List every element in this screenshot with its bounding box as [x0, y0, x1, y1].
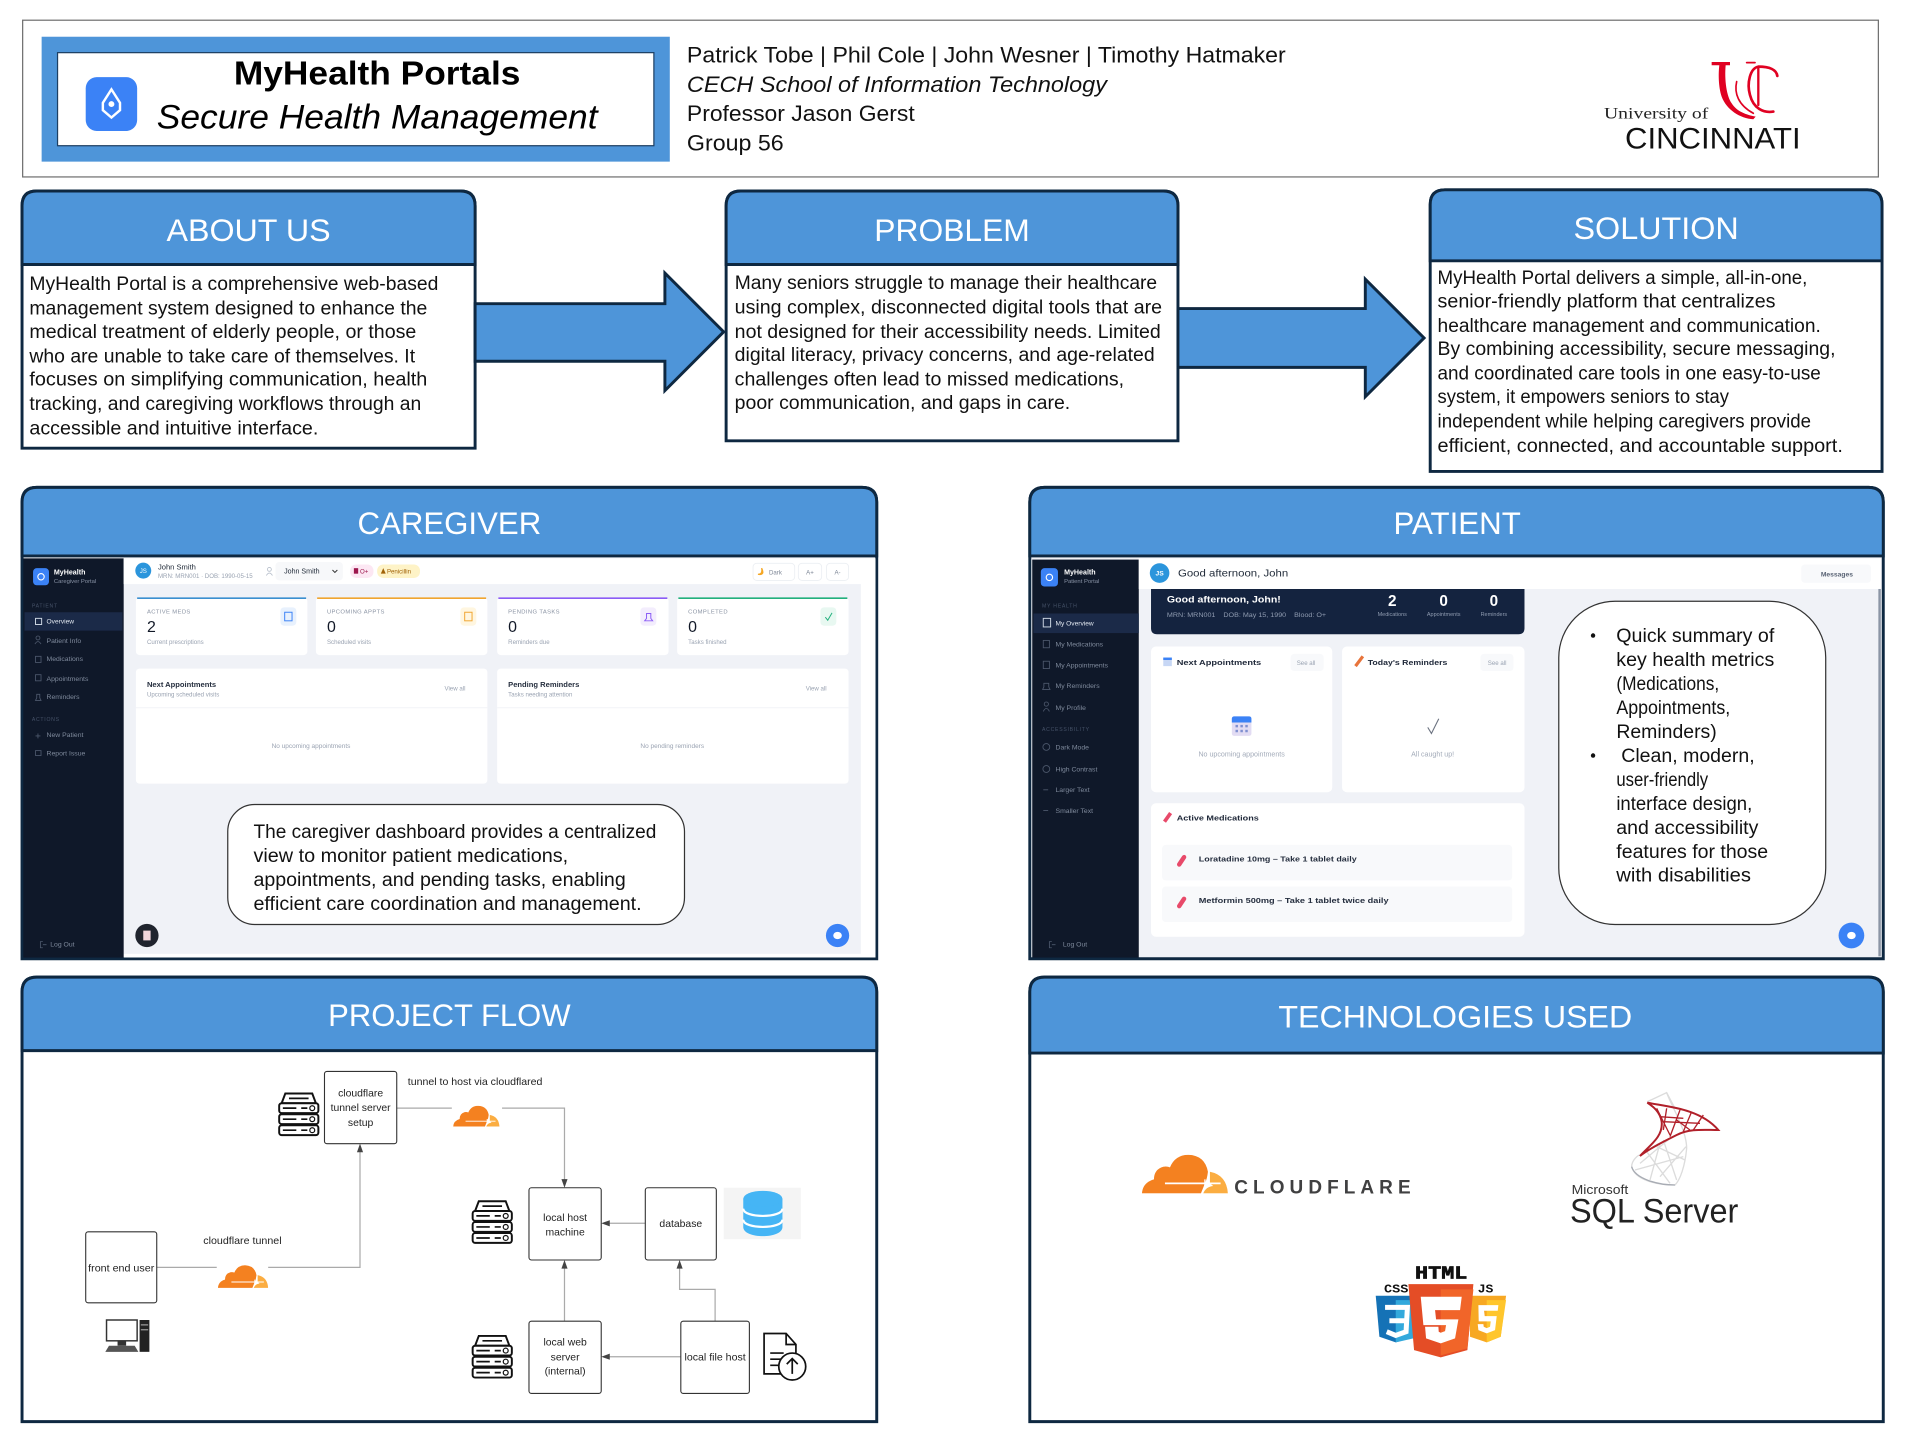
patient greeting banner: [1151, 589, 1524, 634]
heading: ABOUT US: [167, 212, 331, 248]
text block: system, it empowers seniors to stay: [1438, 386, 1729, 408]
caregiver top bar: John Smith: [158, 562, 196, 571]
patient greeting banner: 2: [1388, 593, 1397, 610]
callout: caregiver description: efficient care coordination and management.: [253, 893, 642, 915]
text block: efficient, connected, and accountable support.: [1438, 435, 1843, 457]
next appointments panel: Upcoming scheduled visits: [147, 692, 219, 699]
flow box: database: database: [659, 1219, 702, 1230]
text block: MyHealth Portal is a comprehensive web-based: [29, 273, 438, 295]
caregiver top bar: A+: [806, 569, 814, 576]
caregiver top bar: O+: [360, 569, 369, 576]
patient greeting banner: MRN: MRN001 DOB: May 15, 1990 Blood: O+: [1167, 612, 1326, 619]
title box: [42, 37, 670, 162]
text block: medical treatment of elderly people, or those: [29, 321, 416, 343]
team information: Patrick Tobe | Phil Cole | John Wesner | Timothy Hatmaker: [687, 42, 1286, 67]
next appointments card: See all: [1297, 660, 1315, 667]
caregiver sidebar: Patient Info: [47, 638, 81, 645]
caregiver sidebar: PATIENT: [32, 603, 58, 609]
stat card: active meds: ACTIVE MEDS: [147, 609, 191, 615]
stat card: upcoming appts: UPCOMING APPTS: [327, 609, 385, 615]
callout: patient features: (Medications,: [1616, 673, 1719, 695]
pending reminders panel: Pending Reminders: [508, 680, 579, 689]
patient sidebar: MyHealth: [1064, 568, 1096, 576]
patient sidebar: Smaller Text: [1056, 808, 1093, 815]
heading: [1030, 977, 1883, 1053]
callout: caregiver description: view to monitor patient medications,: [253, 845, 568, 867]
flow box: front end user: [86, 1232, 157, 1303]
heading: SOLUTION: [1573, 210, 1739, 246]
text block: poor communication, and gaps in care.: [735, 392, 1070, 414]
caregiver sidebar: New Patient: [47, 732, 84, 739]
callout: caregiver description: The caregiver dashboard provides a centralized: [253, 821, 656, 843]
next appointments panel: [136, 669, 487, 784]
flow box: local web server: server: [551, 1352, 580, 1363]
patient sidebar: My Profile: [1056, 705, 1086, 712]
panel: project flow: [22, 977, 877, 1422]
callout: patient features: Clean, modern,: [1621, 745, 1755, 767]
callout: patient features: and accessibility: [1616, 817, 1759, 839]
icon: server middle: [473, 1201, 512, 1243]
text block: tracking, and caregiving workflows through an: [29, 393, 421, 415]
patient sidebar: Dark Mode: [1056, 744, 1089, 751]
caregiver sidebar: Overview: [47, 618, 74, 625]
today's reminders card: [1342, 647, 1524, 792]
team information: Group 56: [687, 131, 784, 156]
flow box: local file host: [681, 1321, 749, 1393]
logo: HTML CSS JS: [1376, 1262, 1506, 1357]
stat card: active meds: Current prescriptions: [147, 639, 204, 646]
icon: calendar: [1232, 716, 1251, 736]
caregiver top bar: Penicillin: [387, 569, 411, 576]
heading: PATIENT: [1393, 505, 1521, 541]
team information: [687, 42, 1286, 156]
text block: management system designed to enhance the: [29, 298, 427, 320]
header banner: [23, 20, 1878, 177]
flow box: local web server: [529, 1321, 601, 1393]
pending reminders panel: Tasks needing attention: [508, 692, 572, 699]
patient sidebar: Log Out: [1063, 942, 1087, 949]
text block: [28, 273, 438, 440]
patient greeting banner: 0: [1439, 593, 1448, 610]
next appointments card: [1151, 647, 1332, 792]
flow box: front end user: front end user: [88, 1264, 155, 1275]
flow box: cloudflare tunnel server setup: [324, 1071, 397, 1144]
panel: solution: [1430, 190, 1882, 471]
text block: challenges often lead to missed medications,: [735, 369, 1124, 391]
logo: SQL Server: Microsoft: [1572, 1183, 1629, 1197]
text block: healthcare management and communication.: [1438, 315, 1821, 337]
patient greeting banner: Reminders: [1481, 612, 1507, 618]
stat card: completed: 0: [688, 619, 697, 636]
caregiver sidebar: Log Out: [50, 942, 75, 949]
connectors: [157, 1108, 715, 1357]
text block: MyHealth Portal delivers a simple, all-in-one,: [1438, 267, 1807, 289]
icon: computer: [105, 1320, 149, 1352]
next appointments panel: No upcoming appointments: [272, 743, 350, 750]
text block: Many seniors struggle to manage their healthcare: [735, 272, 1157, 294]
stat card: active meds: 2: [147, 619, 156, 636]
logo: SQL Server: [1570, 1093, 1738, 1231]
panel: patient: [1030, 487, 1883, 959]
team information: CECH School of Information Technology: [687, 72, 1109, 97]
panel: caregiver: [22, 487, 877, 959]
today's reminders card: Today's Reminders: [1368, 658, 1447, 667]
caregiver top bar: JS: [140, 568, 147, 575]
callout: patient features: Reminders): [1616, 721, 1717, 743]
arrowheads: [357, 1144, 683, 1360]
patient sidebar: My Overview: [1056, 621, 1094, 628]
patient sidebar: Patient Portal: [1064, 579, 1099, 585]
flow box: local host machine: machine: [545, 1228, 585, 1239]
patient sidebar: MY HEALTH: [1042, 603, 1078, 609]
icon: server top: [279, 1093, 318, 1135]
flow box: local host machine: local host: [543, 1213, 587, 1224]
callout: caregiver description: appointments, and pending tasks, enabling: [253, 869, 626, 891]
flow box: database: [645, 1188, 716, 1260]
icon: file upload: [764, 1333, 806, 1380]
stat card: completed: [677, 598, 849, 655]
text block: and coordinated care tools in one easy-to-use: [1438, 363, 1821, 385]
caregiver top bar: John Smith: [284, 568, 320, 576]
icon: cloud lower: [218, 1265, 268, 1288]
heading: [726, 191, 1178, 264]
callout: patient features: [1559, 601, 1826, 924]
patient sidebar: My Appointments: [1056, 662, 1109, 669]
flow box: local file host: local file host: [684, 1352, 746, 1363]
logo: HTML CSS JS: JS: [1478, 1283, 1493, 1297]
active medications card: [1151, 803, 1524, 937]
patient sidebar: My Medications: [1056, 642, 1104, 649]
callout: patient features: features for those: [1616, 841, 1768, 863]
stat card: completed: COMPLETED: [688, 609, 728, 615]
text block: accessible and intuitive interface.: [29, 418, 318, 440]
caregiver sidebar: Medications: [47, 656, 84, 663]
text block: [735, 272, 1162, 414]
active medications card: Metformin 500mg – Take 1 tablet twice daily: [1199, 896, 1390, 905]
stat card: pending tasks: 0: [508, 619, 517, 636]
callout: patient features: user-friendly: [1616, 769, 1708, 791]
caregiver sidebar: ACTIONS: [32, 717, 60, 723]
callout: patient features: with disabilities: [1615, 865, 1751, 887]
caregiver sidebar: Caregiver Portal: [54, 579, 96, 585]
patient sidebar: [1032, 560, 1139, 958]
caregiver top bar: [124, 558, 876, 584]
heading: [1430, 190, 1882, 261]
heading: PROJECT FLOW: [328, 997, 571, 1033]
heading: [1030, 487, 1883, 556]
icon: chat button: [826, 924, 849, 947]
pending reminders panel: View all: [806, 686, 827, 693]
heading: TECHNOLOGIES USED: [1278, 998, 1632, 1034]
text block: using complex, disconnected digital tools that are: [735, 296, 1162, 318]
callout: patient features: interface design,: [1616, 793, 1752, 815]
stat card: upcoming appts: Scheduled visits: [327, 639, 371, 646]
today's reminders card: See all: [1488, 660, 1506, 667]
stat card: upcoming appts: 0: [327, 619, 336, 636]
panel: about us: [22, 191, 475, 448]
patient greeting banner: Medications: [1378, 612, 1407, 618]
next appointments card: Next Appointments: [1177, 658, 1261, 667]
patient sidebar: ACCESSIBILITY: [1042, 727, 1090, 733]
heading: [22, 487, 877, 556]
callout: patient features: Appointments,: [1616, 697, 1730, 719]
flow box: cloudflare tunnel server setup: tunnel server: [331, 1103, 391, 1114]
University of Cincinnati logo: [1604, 62, 1801, 155]
heading: PROBLEM: [874, 212, 1030, 248]
patient greeting banner: Appointments: [1427, 612, 1461, 618]
icon: cloud upper: [453, 1106, 499, 1127]
callout: patient features: Quick summary of: [1616, 625, 1775, 647]
caregiver sidebar: MyHealth: [54, 568, 85, 576]
text block: By combining accessibility, secure messaging,: [1438, 338, 1836, 360]
flow box: cloudflare tunnel server setup: setup: [348, 1118, 374, 1129]
callout: patient features: key health metrics: [1616, 649, 1774, 671]
panel: problem: [726, 191, 1178, 441]
next appointments card: No upcoming appointments: [1198, 751, 1285, 759]
callout: caregiver description: [228, 804, 684, 924]
patient greeting banner: 0: [1490, 593, 1498, 610]
caregiver sidebar: [23, 558, 124, 958]
patient top bar: Messages: [1821, 572, 1853, 579]
patient sidebar: High Contrast: [1056, 766, 1097, 773]
team information: Professor Jason Gerst: [687, 101, 915, 126]
University of Cincinnati logo: CINCINNATI: [1625, 122, 1801, 155]
caregiver top bar: Dark: [769, 569, 783, 576]
stat card: pending tasks: PENDING TASKS: [508, 609, 560, 615]
text block: not designed for their accessibility needs. Limited: [735, 321, 1161, 343]
patient top bar: JS: [1155, 571, 1164, 578]
logo: HTML CSS JS: CSS: [1384, 1283, 1408, 1297]
text block: independent while helping caregivers provide: [1438, 410, 1811, 432]
pending reminders panel: No pending reminders: [640, 743, 704, 750]
arrow: about to problem: [475, 273, 724, 391]
logo: HTML CSS JS: HTML: [1415, 1262, 1467, 1284]
caregiver sidebar: Reminders: [47, 694, 80, 701]
icon: check: [1428, 719, 1439, 733]
heading: [22, 977, 877, 1051]
title: MyHealth Portals: [234, 55, 520, 92]
stat card: pending tasks: Reminders due: [508, 639, 550, 646]
icon: server bottom: [473, 1336, 512, 1378]
flow box: local host machine: [529, 1188, 601, 1260]
heading: CAREGIVER: [358, 505, 541, 541]
icon: database: [724, 1188, 801, 1239]
stat card: upcoming appts: [316, 598, 487, 655]
stat card: active meds: [136, 598, 307, 655]
patient greeting banner: Good afternoon, John!: [1167, 594, 1281, 605]
text block: senior-friendly platform that centralizes: [1438, 290, 1776, 312]
stat card: completed: Tasks finished: [688, 639, 727, 646]
logo: SQL Server: SQL Server: [1570, 1193, 1738, 1231]
scrollbar: [1878, 589, 1881, 956]
patient top bar: Good afternoon, John: [1178, 569, 1288, 580]
next appointments panel: View all: [444, 686, 465, 693]
caregiver sidebar: Report Issue: [47, 751, 86, 758]
flow box: local web server: (internal): [545, 1366, 586, 1377]
text block: focuses on simplifying communication, health: [29, 369, 427, 391]
stat card: pending tasks: [497, 598, 669, 655]
icon: notes button: [135, 924, 159, 947]
icon: app logo: [86, 77, 137, 131]
patient sidebar: My Reminders: [1056, 683, 1100, 690]
caregiver sidebar: Appointments: [47, 676, 89, 683]
caregiver top bar: MRN: MRN001 · DOB: 1990-05-15: [158, 573, 253, 580]
next appointments panel: Next Appointments: [147, 680, 216, 689]
University of Cincinnati logo: University of: [1604, 105, 1709, 122]
pending reminders panel: [497, 669, 849, 784]
heading: [22, 191, 475, 264]
logo: cloudflare: CLOUDFLARE: [1234, 1177, 1411, 1198]
caregiver top bar: A-: [834, 569, 841, 576]
patient top bar: [1139, 558, 1881, 589]
text block: who are unable to take care of themselves. It: [28, 345, 416, 367]
today's reminders card: All caught up!: [1411, 751, 1454, 759]
flow box: local web server: local web: [543, 1338, 587, 1349]
active medications card: Loratadine 10mg – Take 1 tablet daily: [1199, 854, 1358, 863]
subtitle: Secure Health Management: [157, 99, 599, 137]
active medications card: Active Medications: [1177, 813, 1259, 822]
text block: [1438, 267, 1843, 457]
icon: chat button: [1839, 923, 1864, 948]
text block: digital literacy, privacy concerns, and age-related: [735, 344, 1155, 366]
flow box: cloudflare tunnel server setup: cloudflare: [338, 1089, 383, 1100]
patient sidebar: Larger Text: [1056, 787, 1090, 794]
label: tunnel to host: tunnel to host via cloudflared: [408, 1077, 543, 1088]
label: cloudflare tunnel: cloudflare tunnel: [203, 1236, 282, 1247]
panel: technologies used: [1030, 977, 1883, 1422]
arrow: problem to solution: [1178, 279, 1424, 397]
logo: cloudflare: [1142, 1155, 1411, 1198]
